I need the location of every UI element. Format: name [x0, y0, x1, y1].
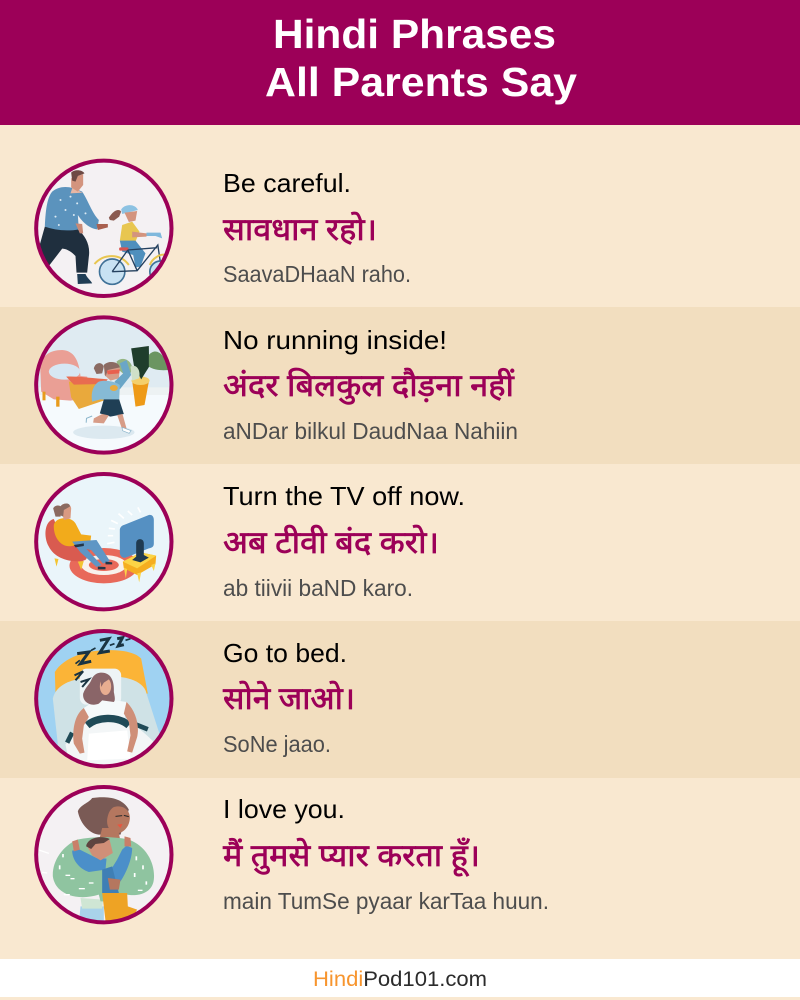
Hindi phrase: अब टीवी बंद करो। [223, 525, 439, 566]
Hindi phrase: सावधान रहो। [223, 212, 377, 253]
English phrase: No running inside! [223, 325, 447, 355]
English phrase: I love you. [223, 794, 345, 824]
icon: girl in superhero cape running indoors [34, 317, 174, 458]
panel: row 3, turn the TV off [34, 472, 463, 612]
Hindi phrase: अंदर बिलकुल दौड़ना नहीं [223, 368, 515, 409]
icon: woman watching television in an armchair [36, 474, 171, 609]
Hindi phrase: मैं तुमसे प्यार करता हूँ। [223, 838, 480, 879]
icon: father teaching daughter to ride a bicycle [36, 161, 171, 296]
panel: row 2, no running inside [0, 307, 800, 464]
footer bar [0, 959, 800, 997]
header banner [0, 0, 800, 125]
title: Hindi Phrases [273, 11, 556, 57]
title: All Parents Say [265, 59, 577, 105]
English phrase: Be careful. [223, 168, 351, 198]
panel: row 4, go to bed [0, 621, 800, 778]
panel: row 1, be careful [34, 158, 410, 298]
romanization: aNDar bilkul DaudNaa Nahiin [223, 418, 518, 444]
panel: row 5, I love you [34, 785, 547, 924]
English phrase: Go to bed. [223, 638, 347, 668]
English phrase: Turn the TV off now. [223, 481, 465, 511]
romanization: ab tiivii baND karo. [223, 575, 413, 601]
romanization: main TumSe pyaar karTaa huun. [223, 888, 549, 914]
romanization: SoNe jaao. [223, 731, 331, 757]
romanization: SaavaDHaaN raho. [223, 261, 411, 287]
Hindi phrase: सोने जाओ। [223, 681, 355, 722]
footer brand text: HindiPod101.com [313, 968, 487, 991]
icon: woman sleeping in bed [36, 631, 171, 769]
title [265, 11, 577, 105]
icon: mother hugging child [36, 787, 171, 925]
